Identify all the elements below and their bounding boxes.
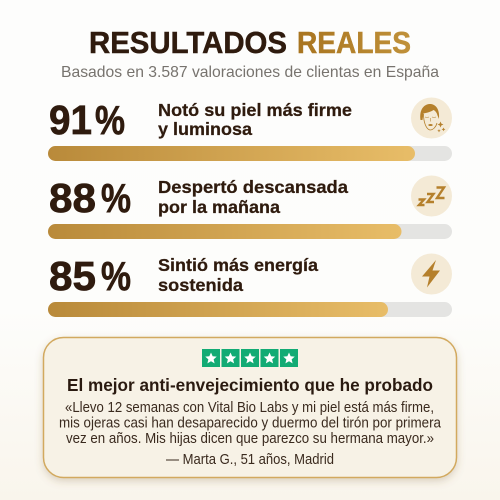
percentage 91%: % <box>95 97 125 143</box>
percentage 88%: 88 <box>49 175 96 221</box>
percentage 85%: 85 <box>49 253 96 299</box>
testimonial quote: mis ojeras casi han desaparecido y duermo del tirón por primera <box>59 416 442 432</box>
label: energy <box>158 255 318 295</box>
subtitle: Basados en 3.587 valoraciones de clientas en España <box>61 64 439 81</box>
label: rested: Despertó descansada <box>158 177 348 197</box>
icon: sleep zzz <box>411 176 452 216</box>
attribution: — Marta G., 51 años, Madrid <box>166 452 334 468</box>
title <box>89 26 411 60</box>
percentage 88% <box>49 175 131 221</box>
percentage 91% <box>49 97 125 143</box>
progress bar 85% <box>48 302 452 317</box>
testimonial quote: «Llevo 12 semanas con Vital Bio Labs y mi piel está más firme, <box>65 400 434 416</box>
label: energy: sostenida <box>158 275 243 295</box>
testimonial quote: vez en años. Mis hijas dicen que parezco su hermana mayor.» <box>66 431 434 447</box>
panel: stat 88% <box>48 175 452 239</box>
icon: face <box>411 98 452 138</box>
progress bar 91% <box>48 146 452 161</box>
label: rested: por la mañana <box>158 197 280 217</box>
progress bar 88% <box>48 224 452 239</box>
panel: testimonial card <box>44 338 456 478</box>
panel: stat 85% <box>48 253 452 317</box>
label: energy: Sintió más energía <box>158 255 318 275</box>
trustpilot stars <box>202 349 298 367</box>
testimonial heading: El mejor anti-envejecimiento que he probado <box>67 375 433 395</box>
percentage 91%: 91 <box>49 97 92 143</box>
percentage 85% <box>49 253 131 299</box>
title: REALES <box>297 26 411 60</box>
label: firmer skin: Notó su piel más firme <box>158 100 352 120</box>
panel: stat 91% <box>48 97 452 161</box>
label: firmer skin <box>158 100 352 139</box>
icon: lightning bolt <box>411 254 452 294</box>
percentage 85%: % <box>101 253 131 299</box>
percentage 88%: % <box>101 175 131 221</box>
title: RESULTADOS <box>89 26 287 60</box>
label: rested <box>158 177 348 217</box>
testimonial quote <box>59 400 442 447</box>
label: firmer skin: y luminosa <box>158 119 252 139</box>
